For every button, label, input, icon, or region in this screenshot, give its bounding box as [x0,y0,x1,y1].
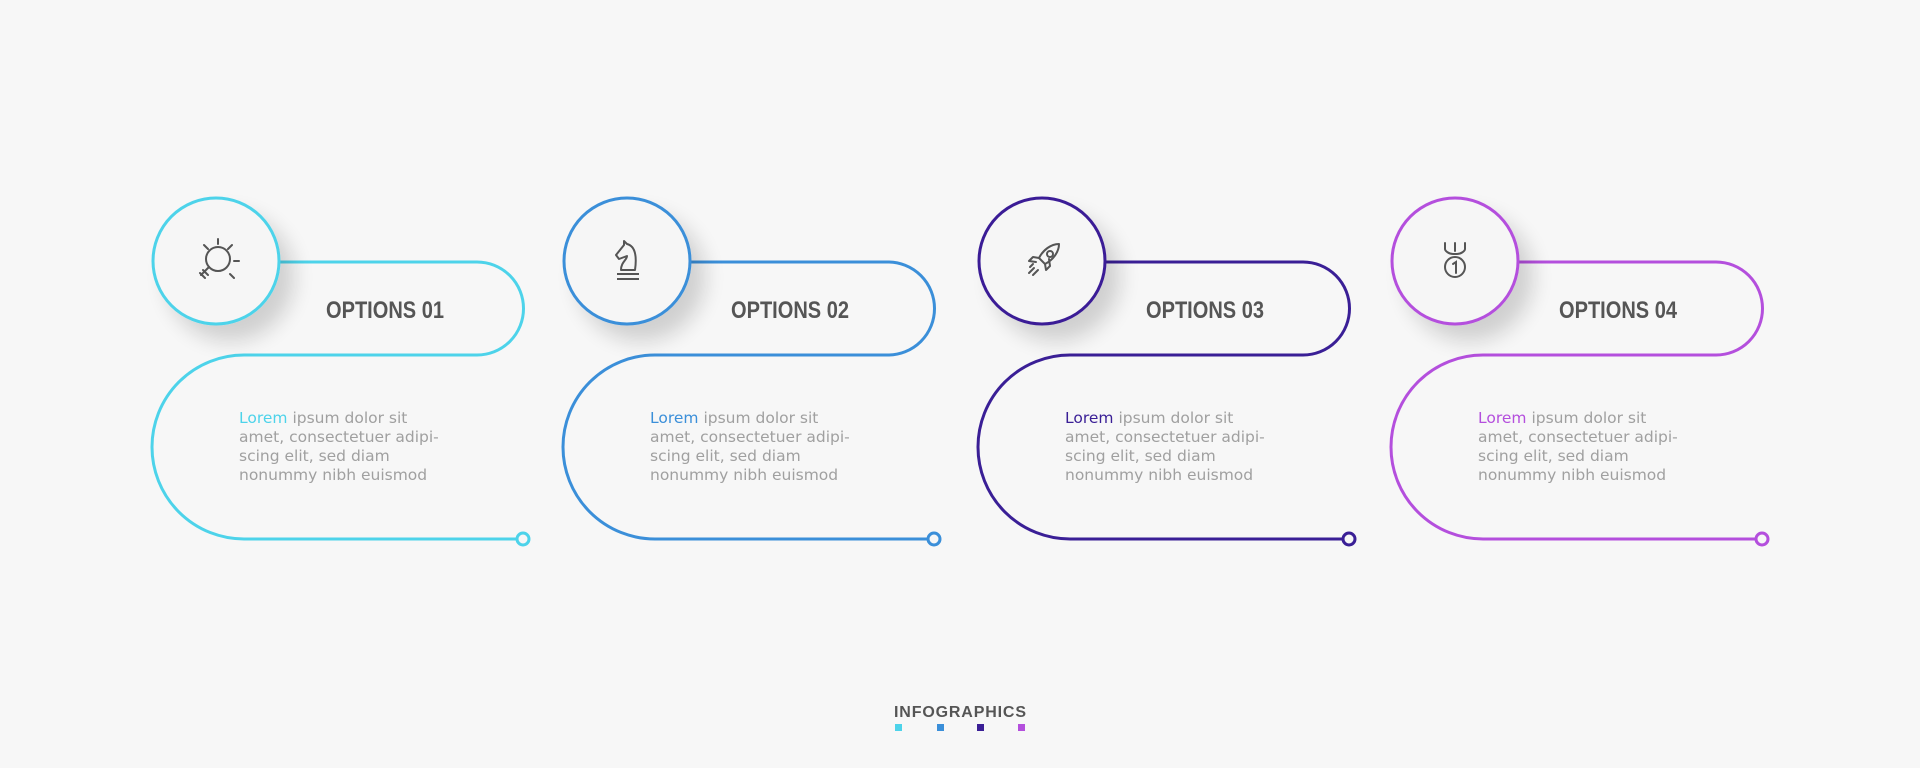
connector path [152,262,524,539]
text block: Lorem ipsum dolor sit [1478,409,1646,427]
text block: amet, consectetuer adipi- [1478,428,1678,446]
footer: infographics label: INFOGRAPHICS [894,704,1026,721]
title: OPTIONS 02 [731,297,849,324]
icon circle [979,198,1105,324]
end dot [517,533,529,545]
text block: scing elit, sed diam [650,447,801,465]
end dot [1343,533,1355,545]
icon circle [564,198,690,324]
icon: medal [1445,243,1465,277]
text block: nonummy nibh euismod [1065,466,1253,484]
panel: options 03 [978,198,1355,545]
text block: scing elit, sed diam [1065,447,1216,465]
connector path [1391,262,1762,539]
title: OPTIONS 01 [326,297,444,324]
panel: options 01 [152,198,529,545]
connector path [563,262,934,539]
footer: infographics label [894,704,1026,731]
icon circle [153,198,279,324]
end dot [928,533,940,545]
icon: chess knight [616,241,639,279]
text block: Lorem ipsum dolor sit [1065,409,1233,427]
text block: amet, consectetuer adipi- [650,428,850,446]
title: OPTIONS 04 [1559,297,1678,324]
text block: amet, consectetuer adipi- [1065,428,1265,446]
end dot [1756,533,1768,545]
title: OPTIONS 03 [1146,297,1264,324]
legend squares [895,724,1025,731]
text block: amet, consectetuer adipi- [239,428,439,446]
text block: nonummy nibh euismod [1478,466,1666,484]
text block: scing elit, sed diam [1478,447,1629,465]
text block: scing elit, sed diam [239,447,390,465]
panel: options 02 [563,198,940,545]
icon circle [1392,198,1518,324]
text block: Lorem ipsum dolor sit [650,409,818,427]
text block: Lorem ipsum dolor sit [239,409,407,427]
text block: nonummy nibh euismod [650,466,838,484]
icon: rocket [1029,244,1059,275]
connector path [978,262,1350,539]
icon: light bulb [200,239,239,278]
panel: options 04 [1391,198,1768,545]
text block: nonummy nibh euismod [239,466,427,484]
